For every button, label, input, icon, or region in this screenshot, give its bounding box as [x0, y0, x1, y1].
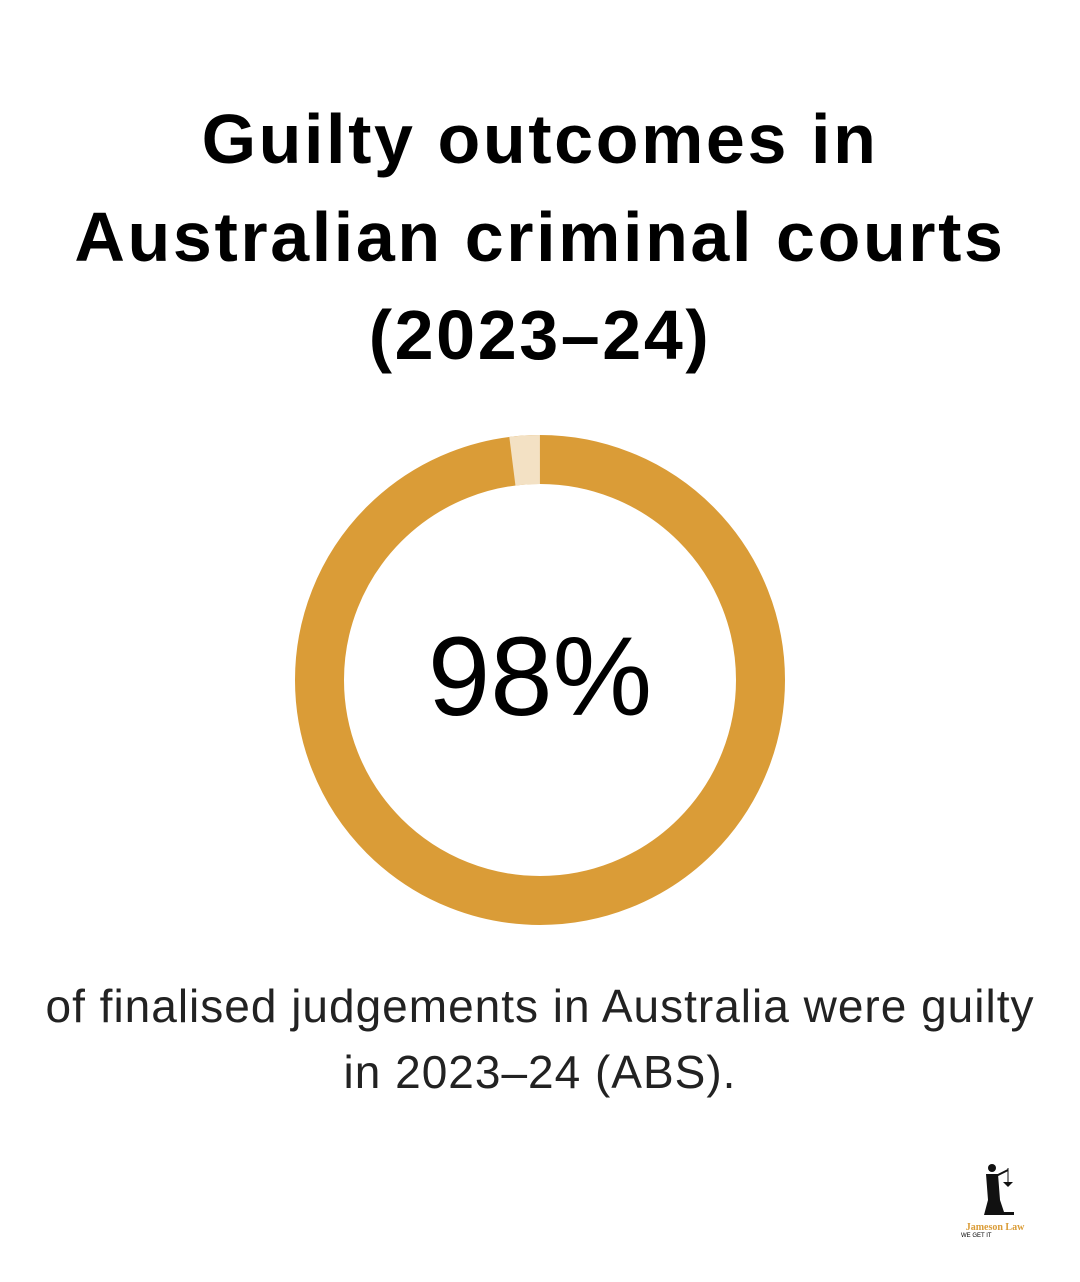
description text: [46, 980, 1034, 1098]
logo: Jameson Law: [966, 1222, 1024, 1233]
logo: [961, 1164, 1024, 1239]
title: Australian criminal courts: [74, 198, 1006, 276]
logo: WE GET IT: [961, 1233, 992, 1239]
title: (2023–24): [369, 296, 711, 374]
donut chart: 98%: [428, 614, 652, 739]
title: Guilty outcomes in: [202, 100, 878, 178]
description text: in 2023–24 (ABS).: [344, 1046, 736, 1098]
description text: of finalised judgements in Australia were guilty: [46, 980, 1034, 1032]
title: [74, 100, 1006, 374]
